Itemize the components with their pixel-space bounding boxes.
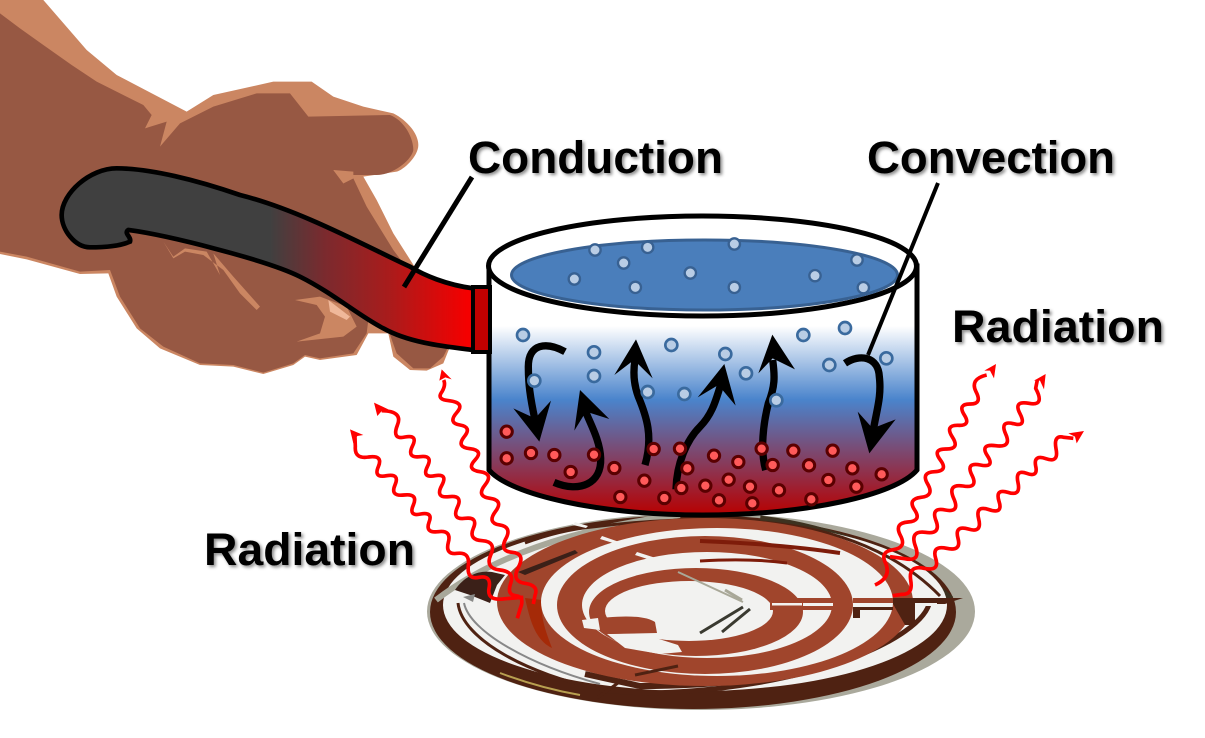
water surface bbox=[512, 240, 898, 310]
label: convection: Convection bbox=[867, 132, 1115, 183]
leader line: conduction bbox=[404, 177, 472, 287]
handle collar bbox=[473, 287, 490, 352]
label: radiation right: Radiation bbox=[952, 301, 1164, 352]
label: radiation left: Radiation bbox=[204, 524, 415, 575]
coil rings bbox=[497, 518, 913, 686]
cool bubbles in water bbox=[517, 322, 892, 406]
hot bubbles in water bbox=[501, 426, 887, 509]
icon: electric burner bbox=[427, 513, 975, 710]
label: conduction: Conduction bbox=[468, 132, 723, 183]
convection arrows bbox=[513, 335, 896, 489]
pan body bbox=[489, 266, 917, 515]
leader line: convection bbox=[868, 183, 938, 355]
wavy arrows: radiation right bbox=[875, 364, 1084, 596]
wavy arrows: radiation left bbox=[350, 369, 536, 618]
cool bubbles on water surface bbox=[569, 238, 869, 293]
pan rim bbox=[488, 216, 916, 316]
icon: pan handle bbox=[62, 168, 473, 350]
icon: hand bbox=[0, 0, 450, 374]
